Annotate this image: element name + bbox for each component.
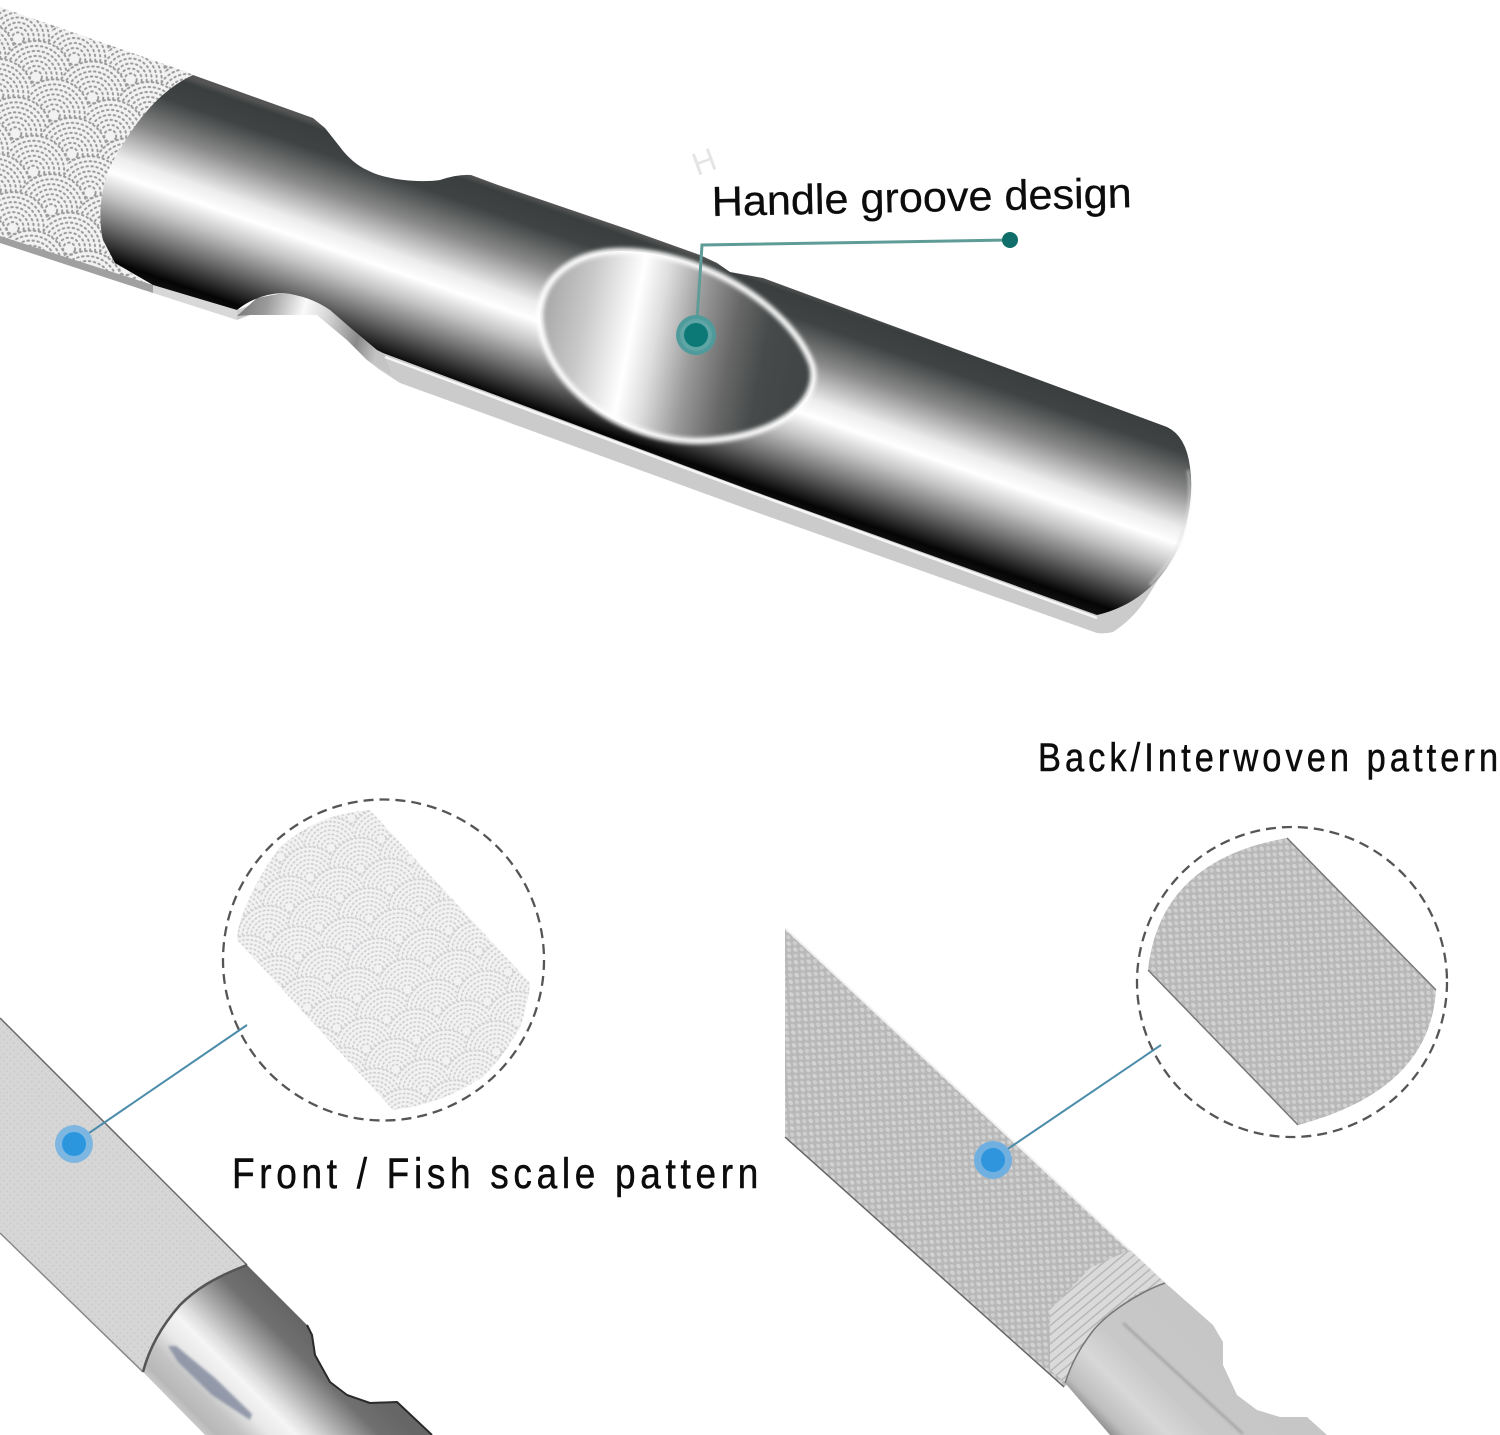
handle, back side [1065, 1283, 1327, 1435]
tip reflection blur [1150, 470, 1190, 585]
connector line and blue marker [55, 1025, 247, 1163]
label: Front / Fish scale pattern: Front / Fish scale pattern [232, 1150, 758, 1198]
highlight line along the lip [385, 357, 1097, 618]
panel: back interwoven detail [785, 827, 1447, 1435]
notch highlight [237, 293, 392, 375]
handle, front side [143, 1265, 432, 1435]
handle seam line [1123, 1323, 1243, 1434]
handle side lip [237, 293, 1182, 633]
panel: front fish scale detail [0, 800, 544, 1435]
dark edges on the handle [143, 1265, 432, 1435]
blue-grey reflection on handle [168, 1346, 252, 1420]
heading: Back / Interwoven pattern: Back/Interwoven pattern [1038, 735, 1498, 780]
blade edges [0, 1018, 247, 1372]
inset circle: magnified fish scale [223, 800, 544, 1120]
file surface: fish scale texture at top left [0, 7, 193, 287]
lower edge strip of the file [0, 236, 237, 320]
panel: main handle close-up [0, 7, 1191, 633]
handle arc seam [1065, 1283, 1165, 1383]
inset circle: magnified interwoven pattern [1137, 827, 1447, 1137]
handle top face with metallic gradient [100, 75, 1191, 615]
hatched transition near the handle [1050, 1250, 1165, 1382]
blade edge highlight and shadow [785, 928, 1166, 1387]
oval thumb groove [540, 251, 813, 441]
file blade, front side [0, 1018, 247, 1372]
faint ghost lettering above the label: H [687, 141, 721, 183]
file blade, back side [785, 928, 1166, 1387]
heading: Handle groove design: Handle groove design [711, 169, 1132, 225]
connector line and blue marker [974, 1045, 1161, 1179]
callout: handle groove pointer [676, 232, 1018, 355]
